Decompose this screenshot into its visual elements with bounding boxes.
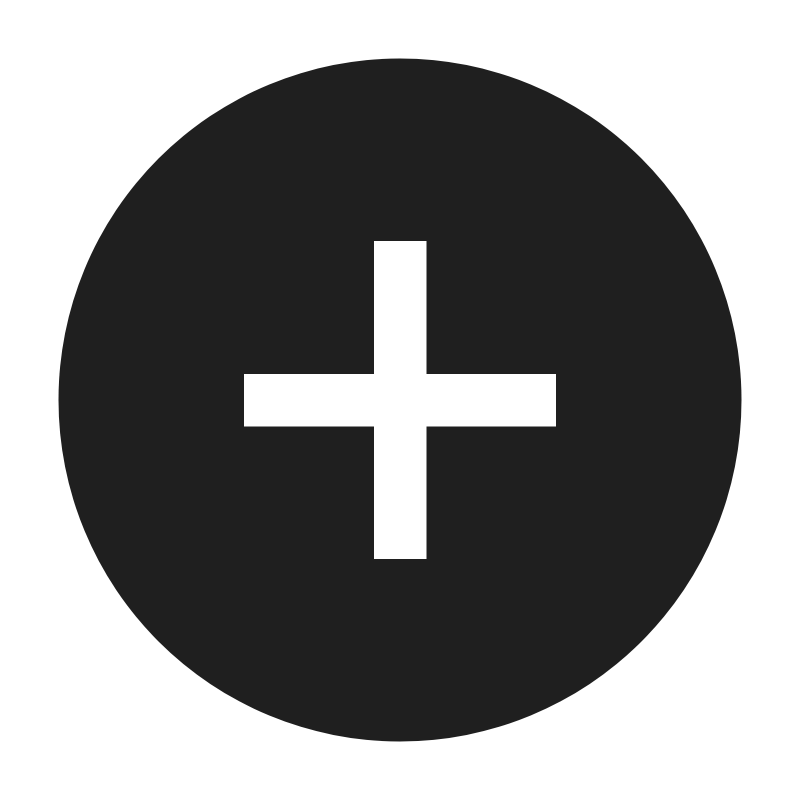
dark circle: [58, 58, 742, 742]
white plus sign: [244, 241, 556, 559]
